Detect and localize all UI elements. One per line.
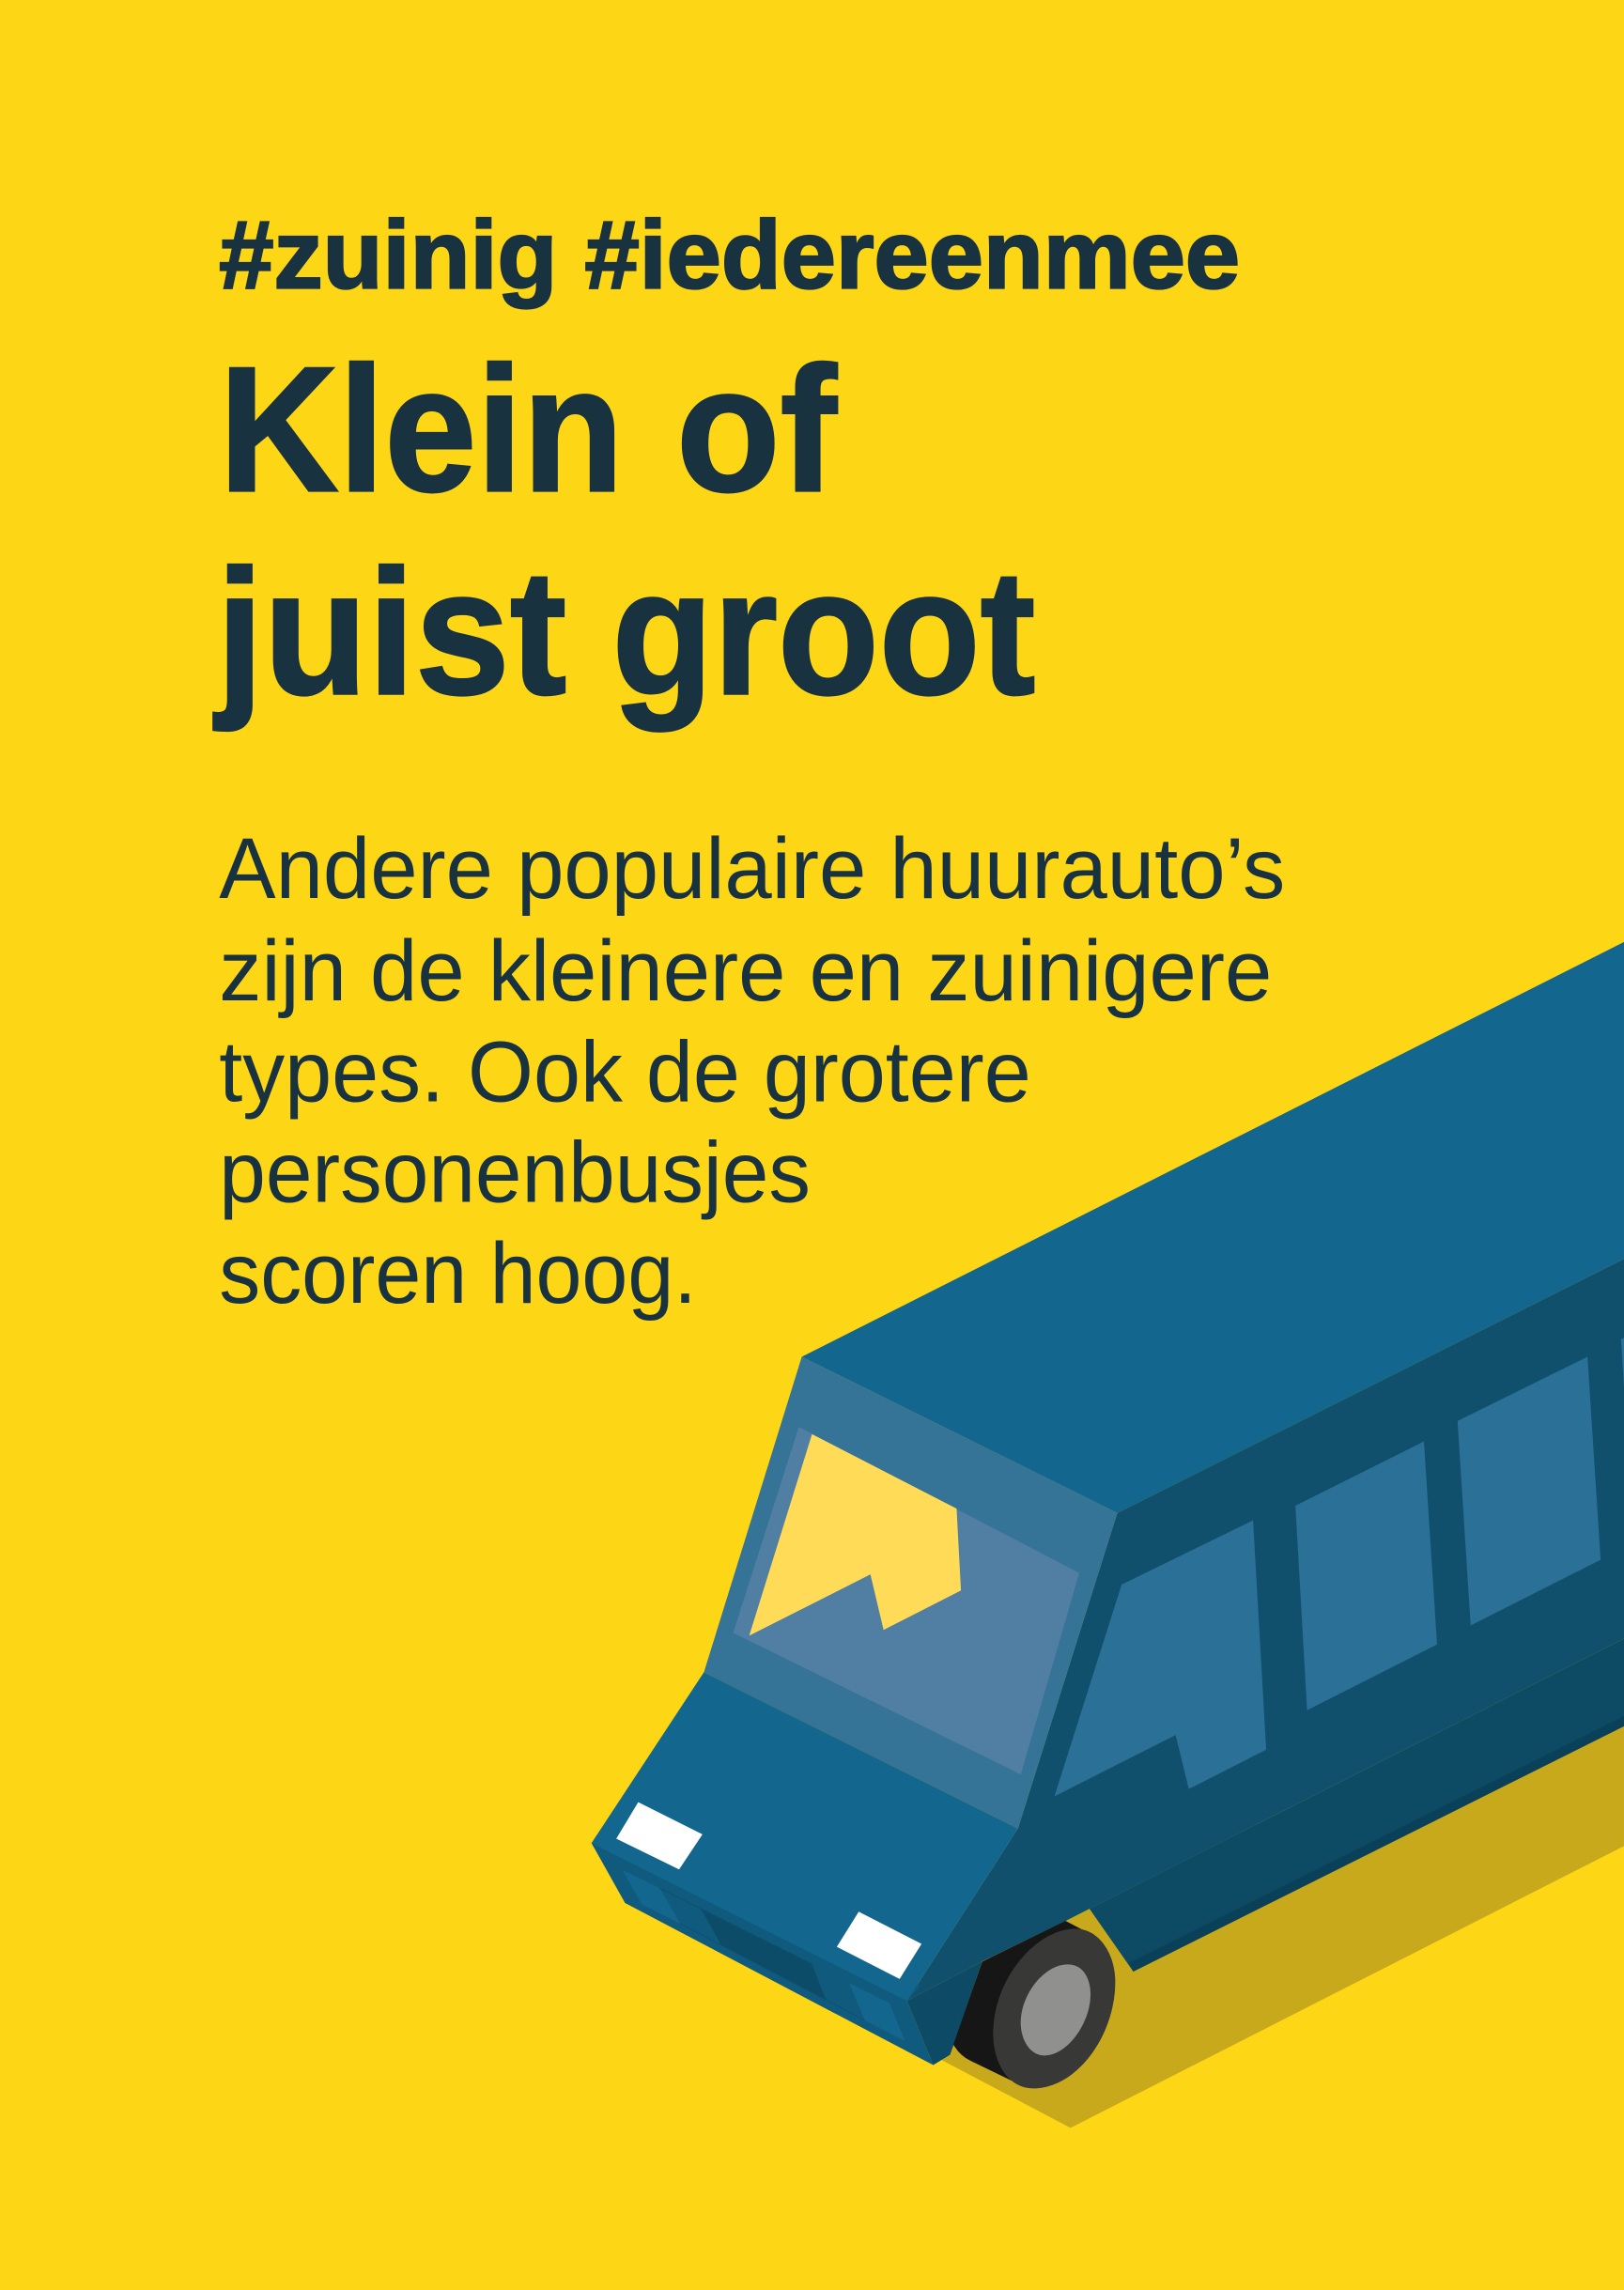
title: of xyxy=(676,330,838,529)
title: Klein xyxy=(219,330,624,529)
body text xyxy=(219,821,1285,1322)
van illustration xyxy=(592,942,1624,2128)
body text: zijn de kleinere en zuinigere xyxy=(219,923,1272,1019)
title: juist xyxy=(213,534,566,733)
title: groot xyxy=(611,534,1035,733)
hashtag line: #zuinig #iedereenmee xyxy=(219,200,1240,308)
ground shadow xyxy=(935,1709,1624,2128)
side windows xyxy=(1055,1338,1624,1796)
van roof xyxy=(802,942,1624,1513)
front corner panel xyxy=(907,1961,982,2066)
front wheel xyxy=(953,1921,1115,2088)
body text: personenbusjes xyxy=(219,1125,811,1221)
windshield yellow reflection xyxy=(750,1434,961,1635)
lower side skirt xyxy=(1090,1639,1624,1972)
van side body xyxy=(907,1259,1624,2001)
title xyxy=(213,330,1035,733)
body text: Andere populaire huurauto’s xyxy=(219,821,1285,917)
windshield surround xyxy=(704,1356,1117,1829)
body text: scoren hoog. xyxy=(219,1226,697,1322)
windshield glass xyxy=(734,1427,1079,1774)
bonnet xyxy=(592,1672,1018,2001)
body text: types. Ook de grotere xyxy=(219,1024,1031,1120)
headlights xyxy=(616,1803,921,1979)
skirt dark strip xyxy=(1129,1716,1624,1972)
front bumper xyxy=(592,1833,934,2066)
